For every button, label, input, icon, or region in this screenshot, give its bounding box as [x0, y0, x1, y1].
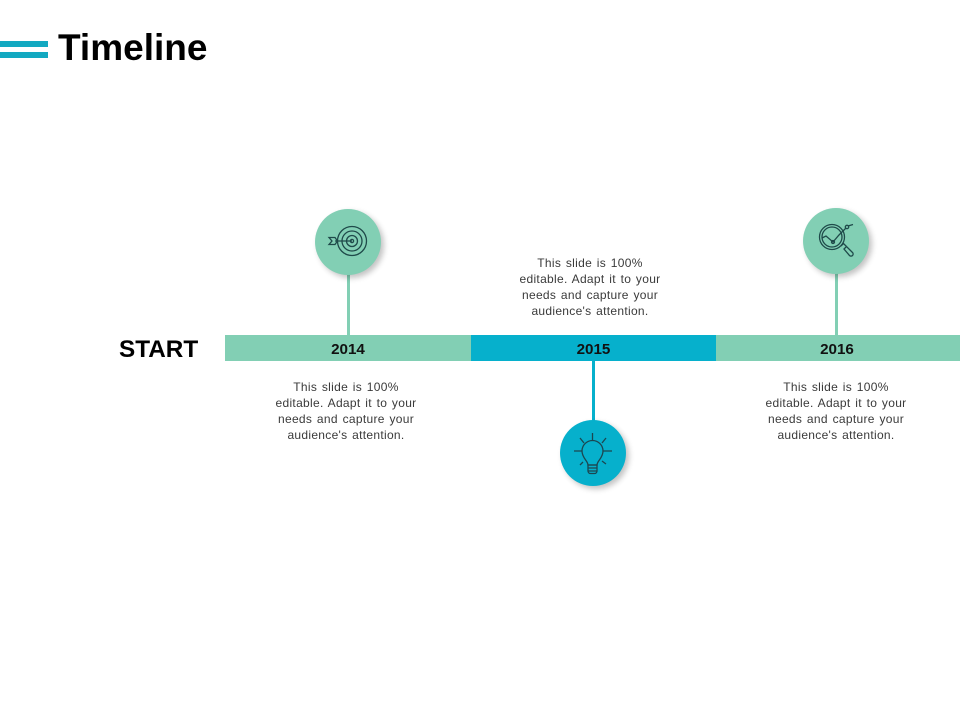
icon: light bulb circle: [560, 420, 626, 486]
text block 2014: audience's attention.: [287, 428, 405, 442]
text block 2015: audience's attention.: [531, 304, 649, 318]
text block 2016: editable. Adapt it to your: [766, 396, 906, 410]
timeline segment 2014: [225, 335, 471, 361]
text block 2014: editable. Adapt it to your: [276, 396, 416, 410]
text block 2016: This slide is 100%: [783, 380, 889, 394]
timeline segment 2016: 2016: [820, 341, 854, 358]
text block 2015: editable. Adapt it to your: [520, 272, 660, 286]
title bars icon: [0, 41, 48, 58]
connector 2014: [347, 270, 350, 335]
icon: magnifier chart circle: [803, 208, 869, 274]
text block 2014: This slide is 100%: [293, 380, 399, 394]
text block 2014: [276, 380, 416, 442]
timeline segment 2016: [716, 335, 960, 361]
connector 2016: [835, 270, 838, 335]
timeline segment 2014: 2014: [331, 341, 365, 358]
text block 2015: needs and capture your: [522, 288, 658, 302]
text block 2015: [520, 256, 660, 318]
text block 2016: needs and capture your: [768, 412, 904, 426]
timeline segment 2015: 2015: [577, 341, 610, 358]
icon: target circle: [315, 209, 381, 275]
text block 2015: This slide is 100%: [537, 256, 643, 270]
text block 2016: [766, 380, 906, 442]
text block 2014: needs and capture your: [278, 412, 414, 426]
text block 2016: audience's attention.: [777, 428, 895, 442]
start label: START: [119, 336, 198, 363]
connector 2015: [592, 361, 595, 423]
timeline segment 2015: [471, 335, 716, 361]
title: Timeline: [58, 27, 207, 68]
